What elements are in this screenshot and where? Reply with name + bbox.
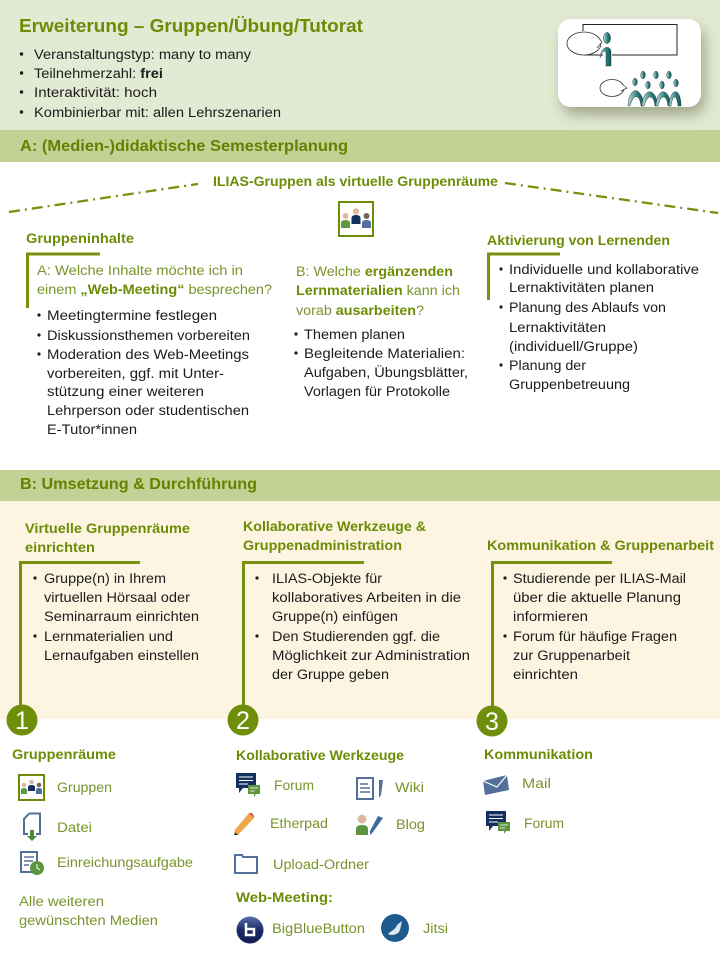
list activation: Planung der <box>509 358 587 373</box>
tools: Kollaborative Werkzeuge: Forum <box>274 778 314 793</box>
list step 2: ILIAS-Objekte für <box>272 571 383 586</box>
icon: Forum <box>486 811 510 834</box>
tools: Kollaborative Werkzeuge: Etherpad <box>270 816 328 831</box>
step 3 <box>476 538 715 736</box>
tools: Kollaborative Werkzeuge: Wiki <box>395 780 424 795</box>
tools: Kommunikation: Kommunikation <box>484 747 593 762</box>
list step 3: informieren <box>513 609 588 624</box>
list step 2: Möglichkeit zur Administration <box>272 648 470 663</box>
text: further media: Alle weiteren <box>19 894 104 909</box>
list activation <box>499 262 699 392</box>
header bullet list: Kombinierbar mit: allen Lehrszenarien <box>34 105 281 120</box>
header bullet list: Teilnehmerzahl: frei <box>34 66 163 81</box>
question B: B: Welche ergänzenden <box>296 264 453 279</box>
central topic with dash-dot lines: ILIAS-Gruppen als virtuelle Gruppenräume <box>213 174 499 189</box>
text: further media <box>19 894 158 928</box>
list A <box>37 308 250 437</box>
list A: E-Tutor*innen <box>47 422 137 437</box>
list A: vorbereiten, ggf. mit Unter- <box>47 366 224 381</box>
text: further media: gewünschten Medien <box>19 913 158 928</box>
list activation: Individuelle und kollaborative <box>509 262 699 277</box>
list A: Moderation des Web-Meetings <box>47 347 249 362</box>
number badge 3: 3 <box>485 708 499 736</box>
number badge 2 <box>228 704 258 736</box>
list B: Begleitende Materialien: <box>304 346 465 361</box>
icon: BigBlueButton <box>236 916 264 944</box>
list step 3: zur Gruppenarbeit <box>513 648 630 663</box>
band B heading: B: Umsetzung & Durchführung <box>20 476 257 493</box>
question A <box>37 263 272 297</box>
header bullet list: Veranstaltungstyp: many to many <box>34 47 251 62</box>
tools: Gruppenräume <box>12 747 193 928</box>
heading: Web-Meeting: Web-Meeting: <box>236 890 333 905</box>
list activation: Planung des Ablaufs von <box>509 300 666 315</box>
icon: Blog <box>356 814 383 835</box>
list step 3: Forum für häufige Fragen <box>513 629 677 644</box>
step 2 <box>228 519 470 736</box>
list step 1: Gruppe(n) in Ihrem <box>44 571 166 586</box>
list step 2: Gruppe(n) einfügen <box>272 609 398 624</box>
column: Gruppeninhalte: Gruppeninhalte <box>26 231 135 246</box>
list step 2: kollaboratives Arbeiten in die <box>272 590 461 605</box>
tools: Gruppenräume: Gruppen <box>57 780 112 795</box>
column: Lernmaterialien <box>294 264 468 399</box>
band A heading: A: (Medien-)didaktische Semesterplanung <box>20 138 348 155</box>
list activation: Lernaktivitäten <box>509 320 606 335</box>
number badge 1 <box>6 704 38 736</box>
list B: Vorlagen für Protokolle <box>304 384 450 399</box>
header bullet list <box>20 47 281 120</box>
number badge 1: 1 <box>15 707 29 735</box>
icon: Upload-Ordner <box>235 855 257 873</box>
tools: Kommunikation <box>483 747 593 834</box>
icon: Etherpad <box>234 813 254 835</box>
list activation: (individuell/Gruppe) <box>509 339 638 354</box>
list activation: Gruppenbetreuung <box>509 377 630 392</box>
step 2: Gruppenadministration <box>243 538 402 553</box>
list B <box>294 327 468 399</box>
tools: Kollaborative Werkzeuge: Kollaborative Werkzeuge <box>236 748 405 763</box>
icon: Forum <box>236 773 260 797</box>
list step 3 <box>503 571 686 682</box>
icon: Mail <box>483 775 509 795</box>
tools: Kollaborative Werkzeuge: Blog <box>396 817 425 832</box>
tools: Kollaborative Werkzeuge: Jitsi <box>423 921 448 936</box>
icon: Wiki <box>357 778 383 799</box>
title: Erweiterung – Gruppen/Übung/Tutorat <box>19 16 363 36</box>
list step 3: über die aktuelle Planung <box>513 590 681 605</box>
band B heading <box>0 470 720 501</box>
list B: Themen planen <box>304 327 405 342</box>
column: Aktivierung von Lernenden <box>487 233 699 392</box>
list step 3: einrichten <box>513 667 578 682</box>
number badge 2: 2 <box>236 707 250 735</box>
tools: Kollaborative Werkzeuge: BigBlueButton <box>272 921 365 936</box>
icon: Jitsi <box>381 914 409 942</box>
number badge 3 <box>476 706 508 736</box>
list activation: Lernaktivitäten planen <box>509 280 654 295</box>
list step 1: Lernaufgaben einstellen <box>44 648 199 663</box>
list B: Aufgaben, Übungsblätter, <box>304 365 468 380</box>
list step 2 <box>255 571 470 682</box>
list step 1: Lernmaterialien und <box>44 629 173 644</box>
list step 1 <box>33 571 199 663</box>
list A: Diskussionsthemen vorbereiten <box>47 328 250 343</box>
central topic with dash-dot lines <box>9 174 718 236</box>
list step 2: Den Studierenden ggf. die <box>272 629 440 644</box>
column: Gruppeninhalte <box>26 231 272 437</box>
header panel <box>0 0 720 130</box>
list A: Meetingtermine festlegen <box>47 308 217 323</box>
step 3: Kommunikation & Gruppenarbeit <box>487 538 715 553</box>
list step 3: Studierende per ILIAS-Mail <box>513 571 686 586</box>
list step 1: virtuellen Hörsaal oder <box>44 590 191 605</box>
icon: many to many scenario <box>558 19 701 107</box>
tools: Gruppenräume: Einreichungsaufgabe <box>57 855 193 870</box>
tools: Kollaborative Werkzeuge: Upload-Ordner <box>273 857 370 872</box>
list step 2: der Gruppe geben <box>272 667 389 682</box>
tools: Kommunikation: Forum <box>524 816 564 831</box>
step 1 <box>6 521 199 736</box>
step 2: Kollaborative Werkzeuge & <box>243 519 426 534</box>
question B <box>296 264 460 318</box>
step 1: einrichten <box>25 540 95 555</box>
question B: Lernmaterialien kann ich <box>296 283 460 298</box>
question B: vorab ausarbeiten ? <box>296 303 424 318</box>
tools: Kommunikation: Mail <box>522 776 551 791</box>
panel: Umsetzung background <box>0 501 720 719</box>
icon: Einreichungsaufgabe <box>21 852 44 875</box>
list A: stützung einer weiteren <box>47 384 204 399</box>
question A: einem „Web-Meeting“ besprechen? <box>37 282 272 297</box>
column: Aktivierung von Lernenden: Aktivierung von Lernenden <box>487 233 670 248</box>
tools: Kollaborative Werkzeuge <box>234 748 448 944</box>
icon: Gruppen <box>19 775 44 800</box>
tools: Gruppenräume: Datei <box>57 820 92 835</box>
icon: groups <box>339 202 373 236</box>
header bullet list: Interaktivität: hoch <box>34 85 157 100</box>
list A: Lehrperson oder studentischen <box>47 403 249 418</box>
question A: A: Welche Inhalte möchte ich in <box>37 263 243 278</box>
list step 1: Seminarraum einrichten <box>44 609 199 624</box>
tools: Gruppenräume: Gruppenräume <box>12 747 117 762</box>
band A heading <box>0 130 720 162</box>
step 1: Virtuelle Gruppenräume <box>25 521 191 536</box>
icon: Datei <box>24 814 40 841</box>
